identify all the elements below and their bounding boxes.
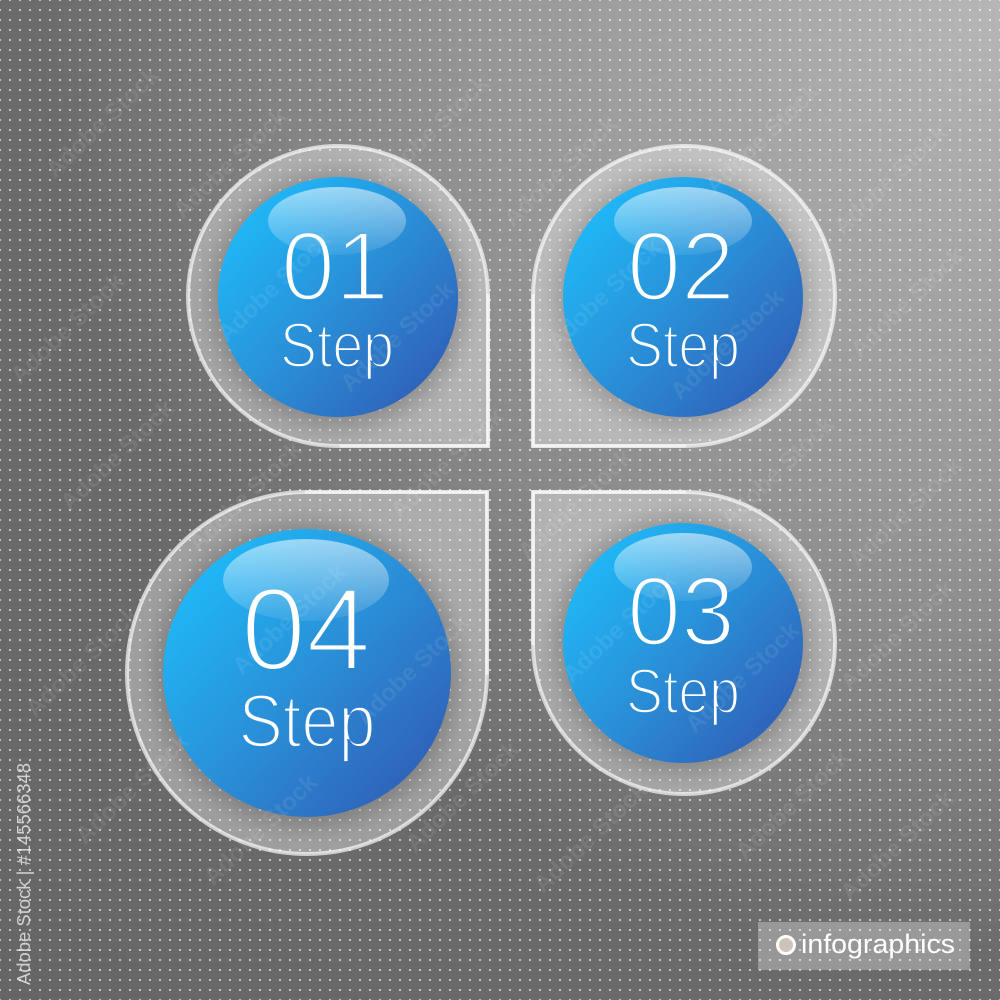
watermark: Adobe Stock repeated: Adobe Stock	[370, 70, 495, 191]
watermark: Adobe Stock repeated: Adobe Stock	[845, 242, 970, 363]
stock id vertical text: Adobe Stock | #145566348	[13, 763, 34, 985]
panel: step 04 drop	[127, 492, 487, 854]
watermark: Adobe Stock repeated: Adobe Stock	[843, 452, 968, 573]
watermark: Adobe Stock repeated: Adobe Stock	[227, 559, 352, 680]
circle: step 03: 03	[627, 556, 735, 666]
watermark: Adobe Stock repeated: Adobe Stock	[498, 111, 623, 232]
watermark: Adobe Stock repeated: Adobe Stock	[700, 78, 825, 199]
panel: step 02 drop	[533, 146, 835, 446]
circle: step 03: Step	[626, 657, 740, 727]
watermark: Adobe Stock repeated: Adobe Stock	[5, 268, 130, 389]
watermark: Adobe Stock repeated: Adobe Stock	[828, 119, 953, 240]
badge: infographics: infographics	[801, 929, 955, 959]
watermark: Adobe Stock repeated: Adobe Stock	[513, 444, 638, 565]
watermark: Adobe Stock repeated: Adobe Stock	[20, 601, 145, 722]
watermark: Adobe Stock repeated: Adobe Stock	[715, 411, 840, 532]
badge: infographics	[758, 922, 970, 970]
watermark: Adobe Stock repeated: Adobe Stock	[55, 395, 180, 516]
circle: step 02: Step	[626, 311, 740, 381]
circle: step 04	[163, 529, 451, 817]
watermark: Adobe Stock repeated: Adobe Stock	[835, 575, 960, 696]
watermark: Adobe Stock repeated: Adobe Stock	[40, 62, 165, 183]
watermark: Adobe Stock repeated: Adobe Stock	[198, 769, 323, 890]
watermark: Adobe Stock repeated: Adobe Stock	[385, 403, 510, 524]
watermark: Adobe Stock repeated: Adobe Stock	[183, 436, 308, 557]
circle: step 03	[563, 523, 803, 763]
watermark: Adobe Stock repeated: Adobe Stock	[528, 777, 653, 898]
panel: step 01 drop	[188, 146, 488, 446]
watermark: Adobe Stock repeated: Adobe Stock	[835, 785, 960, 906]
watermark: Adobe Stock repeated: Adobe Stock	[168, 103, 293, 224]
circle: step 01: 01	[281, 211, 389, 321]
watermark: Adobe Stock repeated: Adobe Stock	[400, 736, 525, 857]
watermark: Adobe Stock repeated: Adobe Stock	[557, 567, 682, 688]
icon: ring	[778, 936, 794, 954]
watermark: Adobe Stock repeated: Adobe Stock	[350, 609, 475, 730]
circle: step 01: Step	[280, 311, 394, 381]
watermark: Adobe Stock repeated: Adobe Stock	[335, 276, 460, 397]
circle: step 02: 02	[627, 211, 735, 321]
watermark: Adobe Stock repeated: Adobe Stock	[212, 226, 337, 347]
watermark: Adobe Stock repeated: Adobe Stock	[730, 744, 855, 865]
circle: step 01	[218, 177, 458, 417]
watermark: Adobe Stock repeated: Adobe Stock	[665, 284, 790, 405]
watermark: Adobe Stock repeated: Adobe Stock	[542, 234, 667, 355]
panel: step 03 drop	[533, 492, 835, 794]
watermark: Adobe Stock repeated: Adobe Stock	[680, 617, 805, 738]
circle: step 02	[563, 177, 803, 417]
circle: step 04: Step	[238, 679, 376, 763]
watermark: Adobe Stock repeated: Adobe Stock	[70, 728, 195, 849]
circle: step 04: 04	[241, 564, 371, 696]
